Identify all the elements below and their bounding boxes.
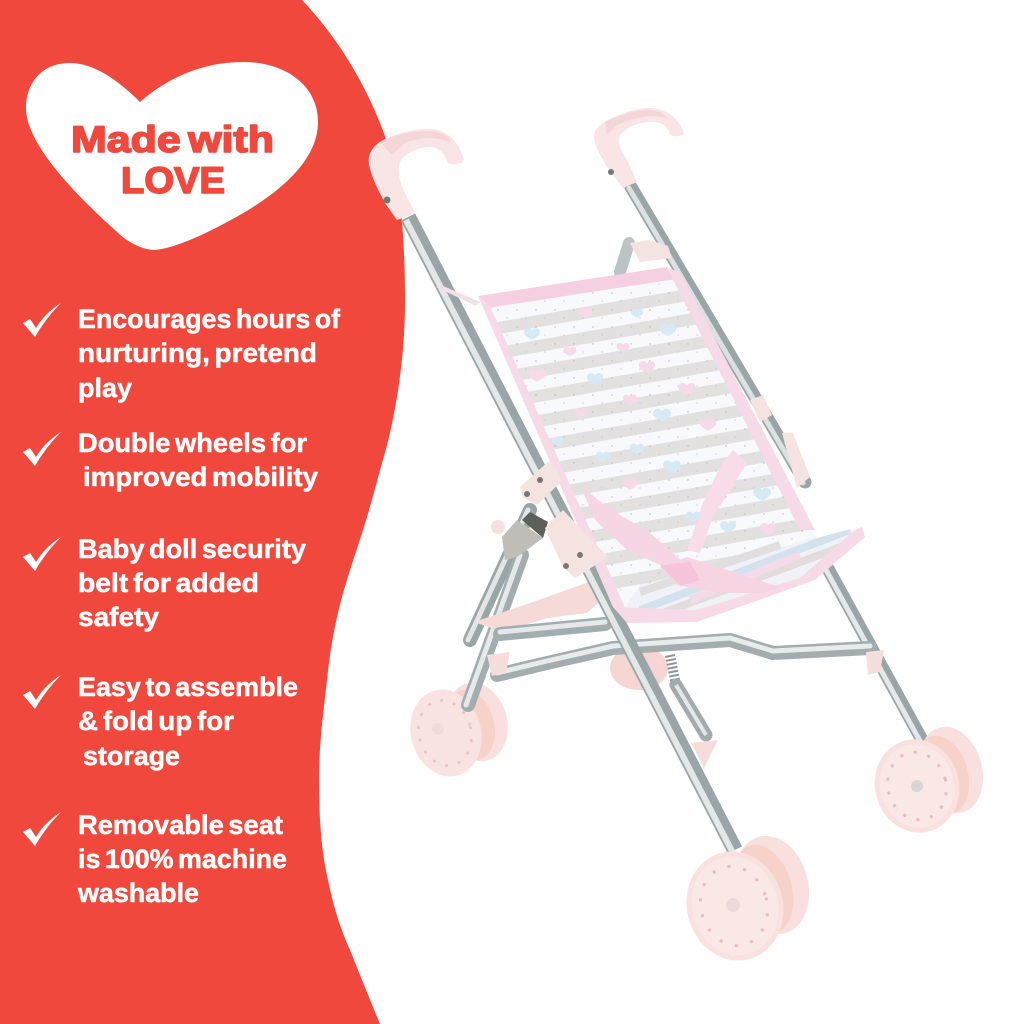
feature: nurturing play: Encourages hours of	[78, 304, 341, 334]
feature: nurturing play: play	[78, 373, 132, 403]
badge: heart with heading	[26, 62, 318, 250]
feature: nurturing play	[23, 303, 341, 403]
seat: fabric	[497, 283, 854, 610]
brake foot	[691, 740, 718, 768]
feature: washable seat: washable	[77, 878, 199, 908]
seat stripes	[497, 290, 806, 588]
feature: double wheels: improved mobility	[83, 462, 318, 492]
wheel: front right	[864, 719, 992, 842]
feature: washable seat: is 100% machine	[78, 844, 287, 874]
feature: security belt	[23, 534, 306, 632]
feature: easy assembly: Easy to assemble	[78, 672, 298, 702]
wheel: rear left	[401, 676, 516, 785]
heading: Made with LOVE	[71, 119, 274, 201]
handle: right	[594, 108, 684, 188]
feature: washable seat: Removable seat	[78, 810, 283, 840]
illustration: doll stroller	[369, 108, 992, 972]
folded rear strut	[474, 577, 613, 632]
frame brackets	[436, 240, 884, 676]
feature: easy assembly	[23, 672, 298, 771]
feature list	[23, 303, 341, 908]
feature: double wheels: Double wheels for	[78, 428, 307, 458]
feature: security belt: Baby doll security	[78, 534, 306, 564]
feature: nurturing play: nurturing, pretend	[78, 338, 317, 368]
seat hearts	[524, 307, 776, 535]
panel: red curved background	[0, 0, 405, 1024]
hidden rear wheel	[610, 646, 668, 690]
frame: tubes behind seat	[466, 187, 922, 741]
feature: double wheels	[23, 428, 318, 492]
handle: left	[369, 129, 464, 220]
frame: main left tube	[406, 217, 735, 853]
feature: security belt: safety	[78, 602, 159, 632]
lower seat panel	[630, 538, 830, 608]
feature: washable seat	[23, 810, 287, 908]
cross bars	[497, 622, 870, 675]
seat: pink border	[478, 267, 865, 623]
heading: Made with LOVE: Made with	[71, 119, 274, 160]
heading: Made with LOVE: LOVE	[121, 160, 225, 201]
feature: easy assembly: & fold up for	[78, 706, 234, 736]
brake spring rod	[670, 655, 706, 735]
feature: easy assembly: storage	[83, 741, 180, 771]
safety belt	[580, 450, 780, 593]
feature: security belt: belt for added	[78, 568, 259, 598]
wheel: front centre	[674, 827, 820, 972]
